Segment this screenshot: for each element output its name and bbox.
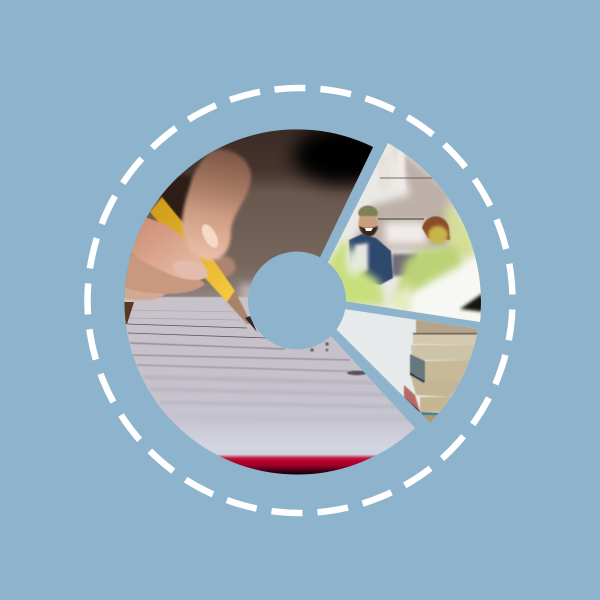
- center hole of the ring: [248, 252, 346, 350]
- man in denim jacket: [349, 206, 393, 285]
- ring finger behind pencil: [214, 256, 235, 277]
- red band at the bottom: [217, 454, 377, 475]
- dark strip at left edge: [124, 302, 134, 324]
- woman with green top: [395, 216, 470, 300]
- notebook paper with ruled lines: [120, 297, 430, 462]
- blurred dark backdrop: [124, 129, 373, 314]
- infographic canvas: [84, 84, 516, 516]
- dashed outer ring: [64, 64, 536, 537]
- panel: photo segment, two people talking: [328, 143, 481, 322]
- fingers: [124, 149, 251, 300]
- panel: photo segment, stack of books: [336, 309, 478, 423]
- blurred green and white foreground: [326, 238, 490, 325]
- pencil: [150, 197, 257, 332]
- book stack: [404, 319, 481, 424]
- panel: large photo segment, hand writing with pencil: [120, 125, 430, 475]
- bright office background: [328, 143, 481, 322]
- pale background: [336, 309, 478, 423]
